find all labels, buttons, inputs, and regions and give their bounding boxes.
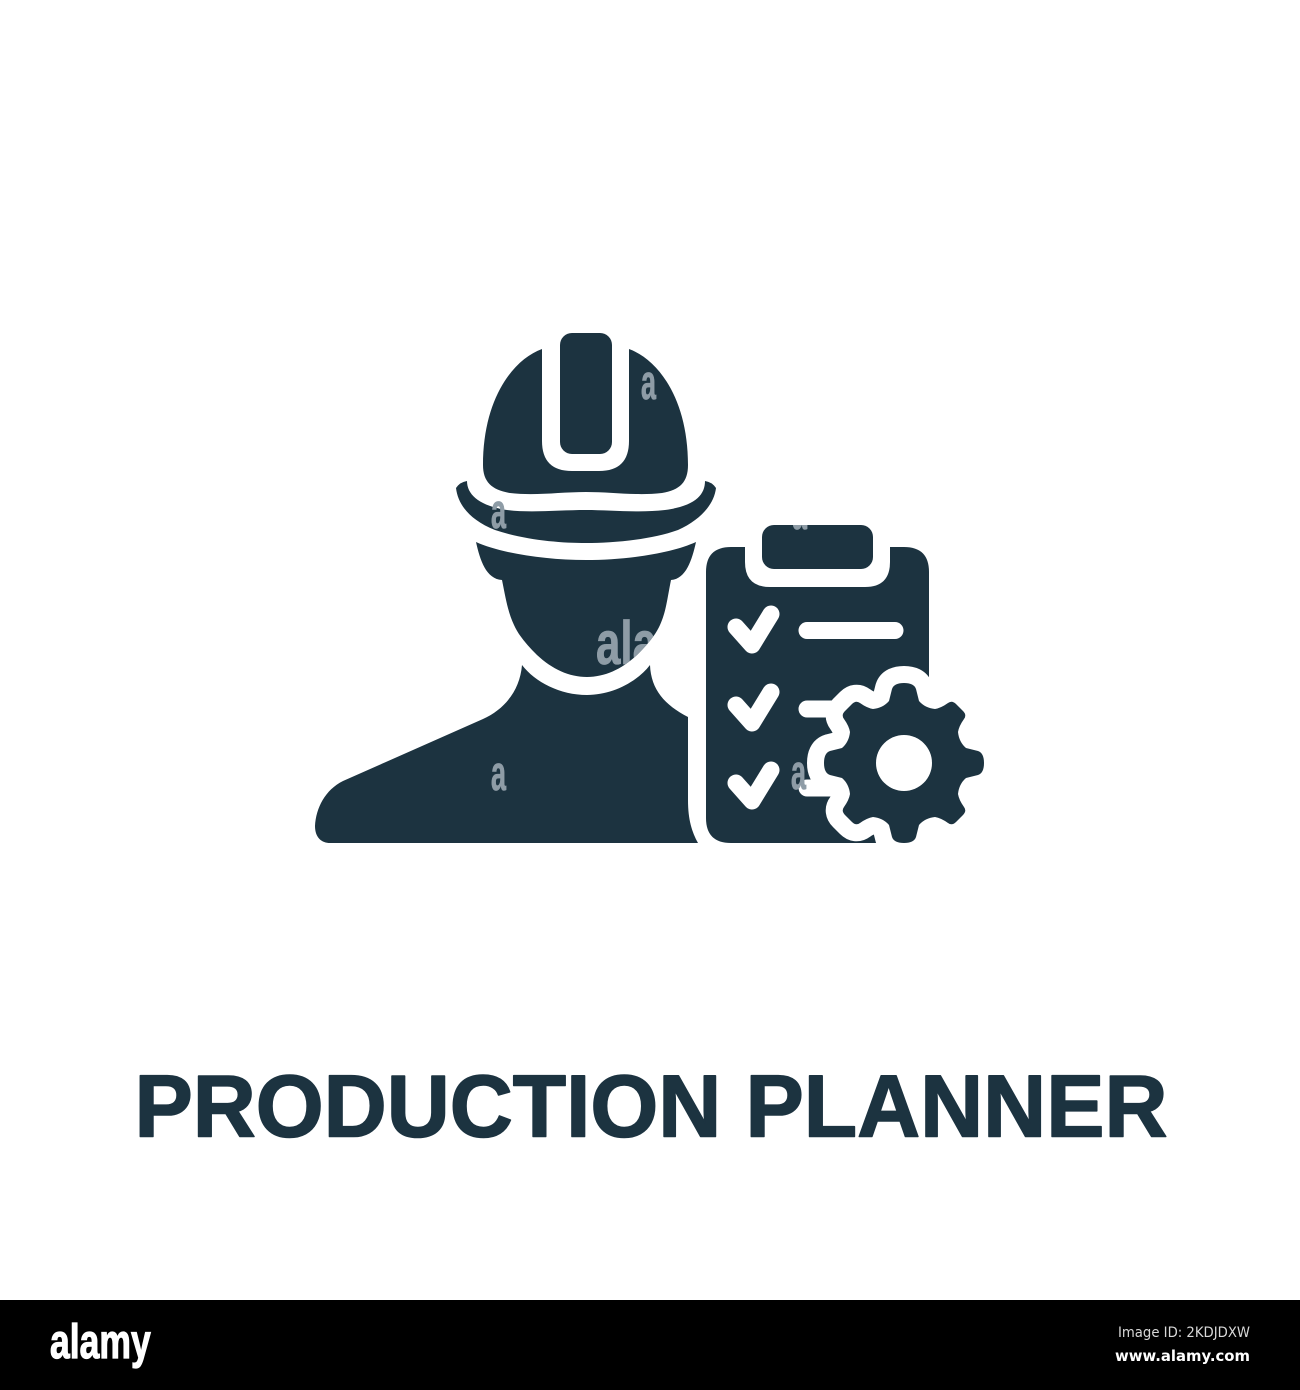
footer band (0, 1300, 1300, 1390)
icon: worker (315, 333, 716, 843)
checklist lines (807, 630, 895, 788)
watermarks: alam (596, 610, 696, 678)
footer logo: alamy (50, 1315, 151, 1368)
shoulders (315, 665, 698, 843)
clipboard board (706, 547, 929, 843)
clipboard clip (762, 525, 873, 569)
website: www.alamy.com (1115, 1347, 1250, 1365)
image id: Image ID: 2KDJDXW (1118, 1325, 1250, 1341)
watermarks: a (791, 746, 807, 800)
gear hole (876, 735, 932, 791)
face (476, 542, 696, 677)
gear outline (824, 683, 984, 843)
watermarks: a (792, 486, 808, 540)
hard hat dome (483, 349, 688, 494)
hard hat brim (456, 481, 716, 543)
icon: gear (824, 683, 984, 843)
checklist ticks (736, 614, 771, 801)
watermarks (491, 356, 808, 801)
watermarks: a (491, 747, 507, 801)
gear body (824, 683, 984, 843)
watermarks: a (641, 356, 657, 410)
icon: production planner (315, 333, 984, 843)
watermarks: a (491, 485, 507, 539)
title: PRODUCTION PLANNER (134, 1056, 1168, 1156)
icon: clipboard (706, 525, 929, 843)
hard hat ridge (560, 333, 612, 454)
